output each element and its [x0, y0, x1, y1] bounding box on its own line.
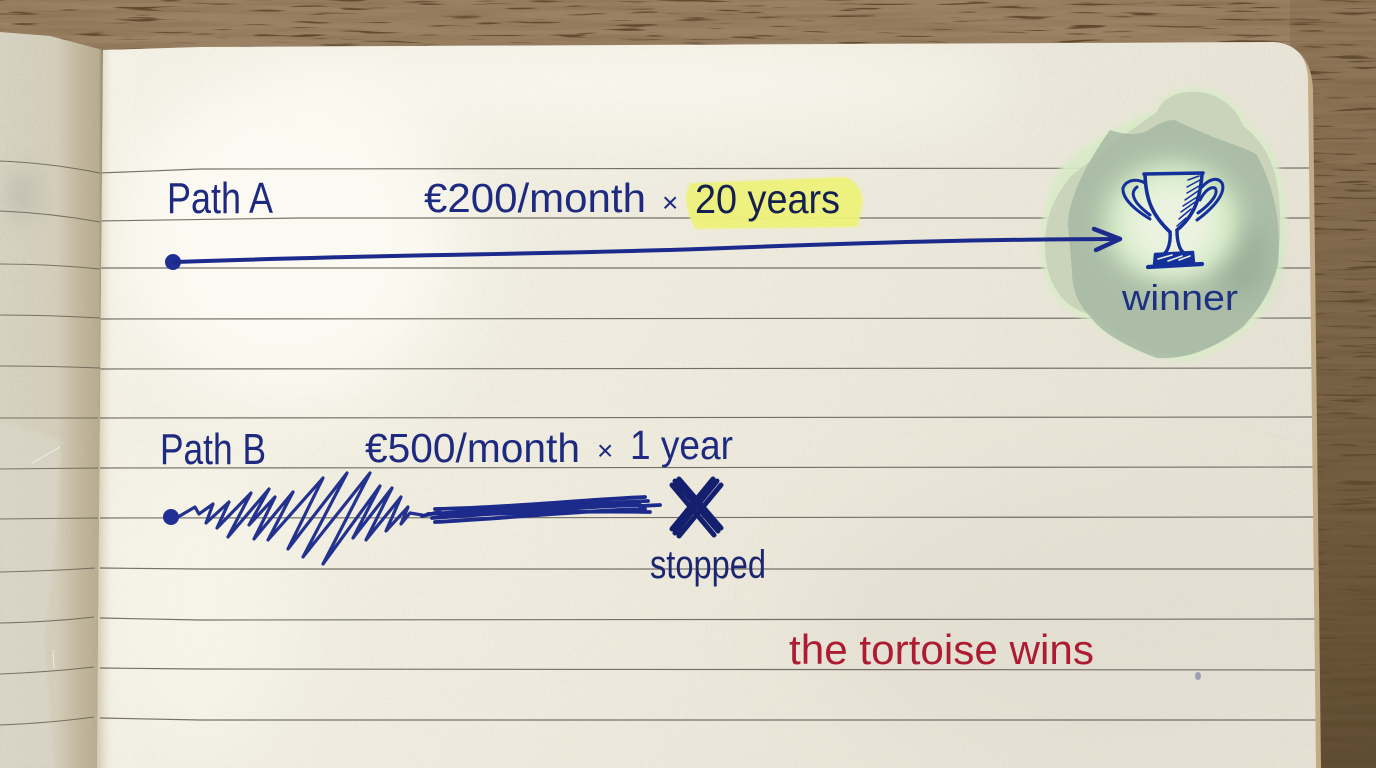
- equation: €500 per month for 1 year: ×: [597, 435, 613, 466]
- equation: €500 per month for 1 year: 1 year: [630, 422, 733, 468]
- left notebook page: [0, 32, 103, 768]
- equation: €500 per month for 1 year: €500/month: [365, 425, 580, 471]
- scribble: Path B line: [163, 473, 660, 564]
- cup shading: [1177, 176, 1200, 226]
- equation: €200 per month for 20 years: €200/month: [424, 175, 646, 221]
- label: Path A: Path A: [167, 174, 274, 223]
- watercolour blob behind trophy: [1040, 88, 1286, 362]
- cup body: [1144, 173, 1203, 232]
- arrow: Path A line: [165, 229, 1120, 270]
- label: winner: winner: [1121, 277, 1238, 318]
- icon: X stop mark: [672, 479, 721, 536]
- label: stopped: stopped: [650, 543, 766, 587]
- page stack edge: [1296, 50, 1321, 768]
- highlight behind 20 years: [686, 177, 863, 229]
- stem: [1165, 231, 1183, 253]
- icon: trophy: [1123, 173, 1223, 267]
- conclusion: the tortoise wins: the tortoise wins: [789, 626, 1094, 673]
- equation: €200 per month for 20 years: 20 years: [695, 176, 840, 222]
- equation: €500 per month for 1 year: [365, 422, 733, 471]
- cup handles: [1123, 179, 1223, 220]
- label: Path B: Path B: [160, 425, 266, 474]
- base: [1154, 252, 1194, 265]
- equation: €200 per month for 20 years: [424, 175, 840, 222]
- equation: €200 per month for 20 years: ×: [662, 187, 678, 218]
